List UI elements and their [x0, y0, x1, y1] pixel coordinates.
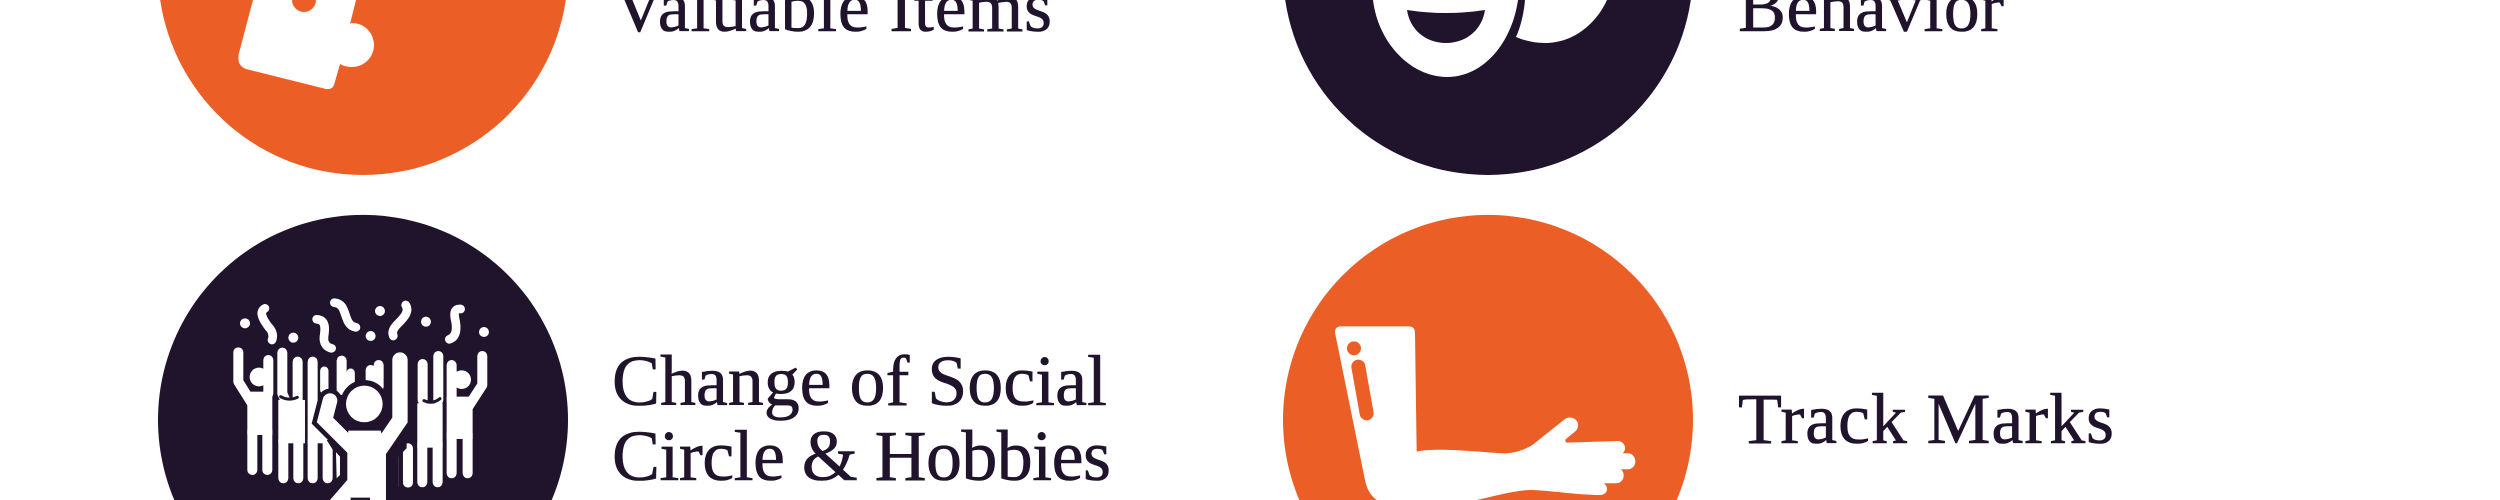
icon: arm with track marks on orange circle	[1283, 215, 1693, 500]
icon: faces on dark circle	[1285, 0, 1691, 175]
icon part: squiggles and dots	[262, 303, 461, 348]
icon: party crowd on dark circle	[158, 215, 568, 500]
text: Change of Social Circle & Hobbies: Circle & Hobbies	[612, 416, 1111, 496]
text: Change of Social Circle & Hobbies: Change of Social	[612, 341, 1107, 421]
text: Track Marks: Track Marks	[1738, 379, 2114, 459]
icon part: crowd	[238, 352, 482, 487]
icon: puzzle piece on orange circle	[160, 0, 566, 175]
text: Change of Social Circle & Hobbies	[612, 341, 1111, 496]
icon part: front person	[325, 360, 407, 500]
